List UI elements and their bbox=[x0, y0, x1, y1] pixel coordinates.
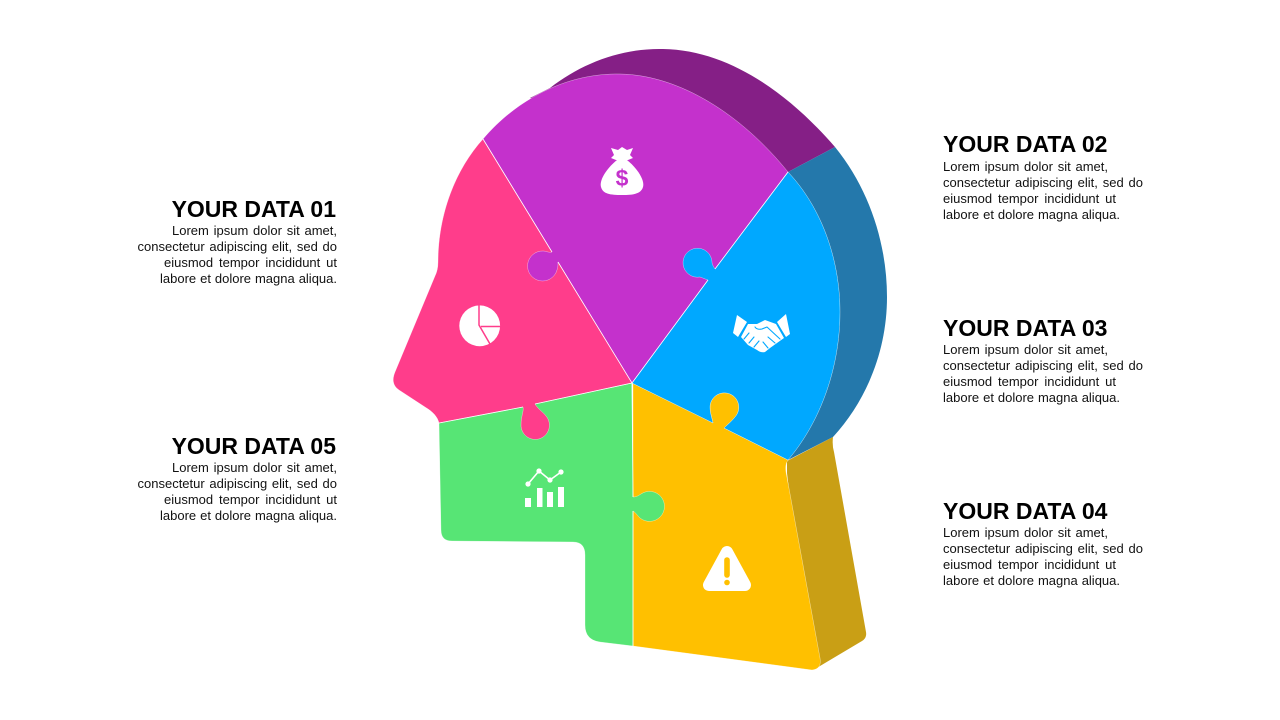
icon: pie chart bbox=[459, 305, 501, 346]
heading 02: YOUR DATA 02 bbox=[943, 131, 1107, 157]
heading 01: YOUR DATA 01 bbox=[172, 196, 336, 222]
text block: your data 03 bbox=[943, 315, 1143, 405]
body 04: eiusmod tempor incididunt ut bbox=[943, 557, 1116, 572]
body 01 bbox=[138, 223, 337, 286]
text block: your data 01 bbox=[138, 196, 337, 286]
body 01: labore et dolore magna aliqua. bbox=[160, 271, 337, 286]
body 05 bbox=[138, 460, 337, 523]
text block: your data 04 bbox=[943, 498, 1143, 588]
body 02 bbox=[943, 159, 1143, 222]
icon: handshake bbox=[733, 314, 790, 352]
heading 05: YOUR DATA 05 bbox=[172, 433, 336, 459]
text block: your data 02 bbox=[943, 131, 1143, 222]
icon: money bag bbox=[601, 147, 643, 195]
puzzle piece: yellow bbox=[632, 383, 820, 670]
3D side: purple bbox=[530, 49, 835, 172]
body 03: eiusmod tempor incididunt ut bbox=[943, 374, 1116, 389]
body 05: labore et dolore magna aliqua. bbox=[160, 508, 337, 523]
text block: your data 05 bbox=[138, 433, 337, 523]
icon: money bag: $ bbox=[616, 165, 629, 191]
icon: warning triangle bbox=[709, 552, 745, 585]
body 02: Lorem ipsum dolor sit amet, bbox=[943, 159, 1108, 174]
body 01: Lorem ipsum dolor sit amet, bbox=[172, 223, 337, 238]
body 03: Lorem ipsum dolor sit amet, bbox=[943, 342, 1108, 357]
body 03: consectetur adipiscing elit, sed do bbox=[943, 358, 1143, 373]
body 04 bbox=[943, 525, 1143, 588]
body 04: labore et dolore magna aliqua. bbox=[943, 573, 1120, 588]
body 05: eiusmod tempor incididunt ut bbox=[164, 492, 337, 507]
body 05: consectetur adipiscing elit, sed do bbox=[138, 476, 337, 491]
3D side: gold bbox=[787, 437, 866, 669]
body 02: consectetur adipiscing elit, sed do bbox=[943, 175, 1143, 190]
heading 03: YOUR DATA 03 bbox=[943, 315, 1107, 341]
body 05: Lorem ipsum dolor sit amet, bbox=[172, 460, 337, 475]
heading 04: YOUR DATA 04 bbox=[943, 498, 1107, 524]
3D side: blue bbox=[788, 147, 887, 460]
body 01: eiusmod tempor incididunt ut bbox=[164, 255, 337, 270]
body 02: labore et dolore magna aliqua. bbox=[943, 207, 1120, 222]
body 02: eiusmod tempor incididunt ut bbox=[943, 191, 1116, 206]
body 04: Lorem ipsum dolor sit amet, bbox=[943, 525, 1108, 540]
puzzle piece: pink bbox=[393, 139, 632, 439]
puzzle piece: purple bbox=[483, 74, 788, 383]
puzzle piece: blue bbox=[632, 172, 840, 460]
puzzle piece: green bbox=[439, 383, 664, 646]
body 04: consectetur adipiscing elit, sed do bbox=[943, 541, 1143, 556]
body 01: consectetur adipiscing elit, sed do bbox=[138, 239, 337, 254]
body 03 bbox=[943, 342, 1143, 405]
body 03: labore et dolore magna aliqua. bbox=[943, 390, 1120, 405]
icon: bar and line chart bbox=[525, 468, 564, 507]
